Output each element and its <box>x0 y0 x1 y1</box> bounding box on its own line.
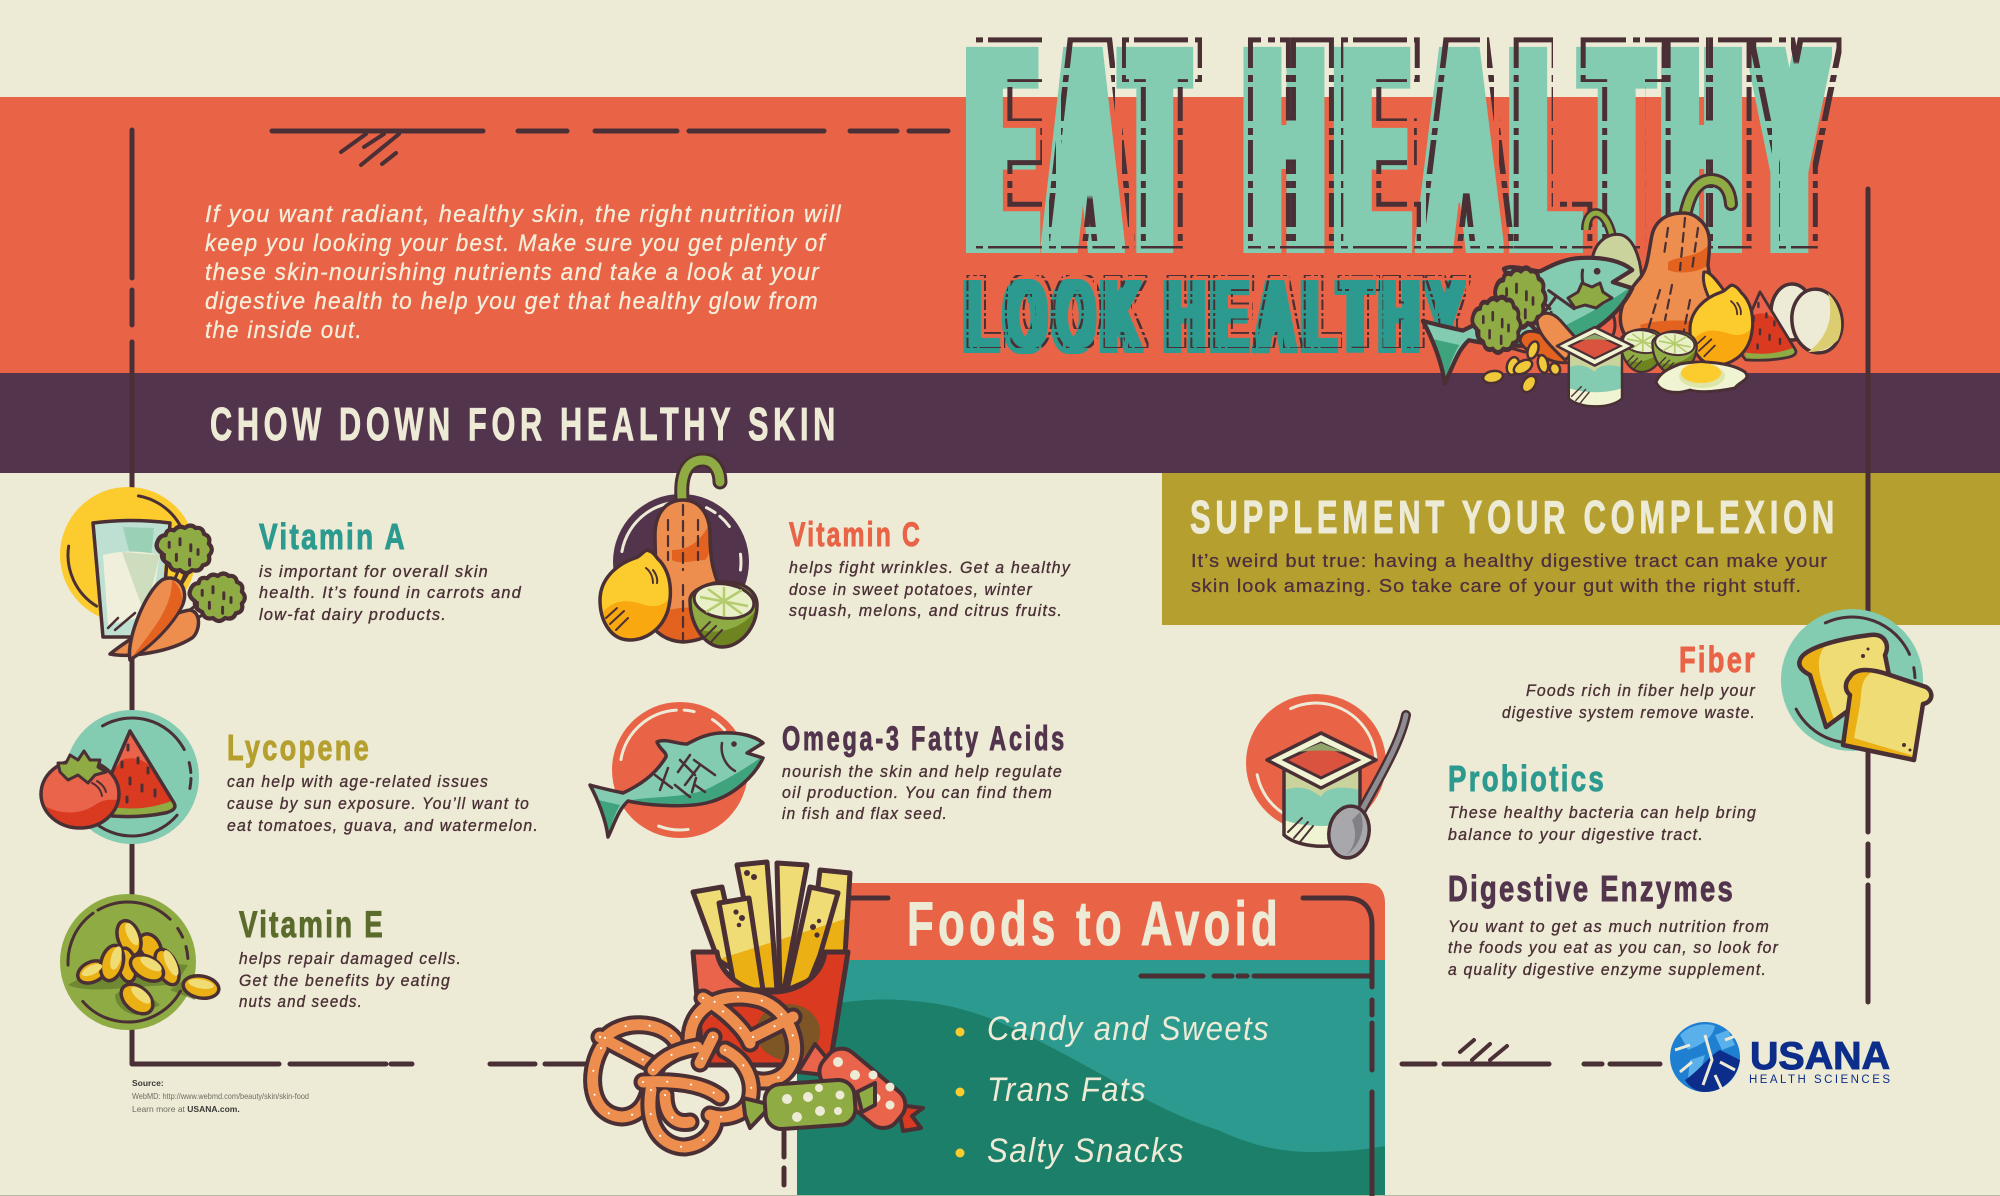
intro paragraph: keep you looking your best. Make sure you get plenty of <box>205 230 827 257</box>
panel: foods to avoid <box>797 883 1385 1196</box>
icon: milk and carrots on yellow circle <box>58 485 245 660</box>
text: fiber: Foods rich in fiber help your <box>1526 681 1756 700</box>
fish <box>1423 258 1632 384</box>
eggs <box>1771 284 1846 356</box>
green candy <box>743 1079 875 1130</box>
text: omega-3 fatty acids: Omega-3 Fatty Acids <box>782 720 1067 758</box>
red candy <box>798 1042 923 1135</box>
text: vitamin E: nuts and seeds. <box>239 992 363 1011</box>
supplement text block: It’s weird but true: having a healthy digestive tract can make your <box>1191 551 1828 571</box>
text: vitamin C: helps fight wrinkles. Get a healthy <box>789 558 1071 577</box>
list: foods to avoid: Candy and Sweets <box>987 1010 1270 1048</box>
supplement text block <box>1190 491 1839 596</box>
text: probiotics <box>1448 758 1757 844</box>
pale gourd <box>1586 213 1642 300</box>
subtitle: LOOK HEALTHY: HEALTHY <box>1169 256 1474 368</box>
capsules <box>1482 340 1562 395</box>
logo: USANA Health Sciences <box>1670 1022 1890 1092</box>
pretzels <box>593 997 795 1147</box>
text: vitamin C: Vitamin C <box>789 516 922 554</box>
text: vitamin A: low-fat dairy products. <box>259 605 447 624</box>
subtitle: LOOK HEALTHY: LOOK <box>965 261 1147 373</box>
text: fiber: digestive system remove waste. <box>1502 703 1756 722</box>
yogurt cup <box>1557 327 1633 406</box>
panel: orange banner <box>0 97 2000 373</box>
text: vitamin C: squash, melons, and citrus fruits. <box>789 601 1063 620</box>
text: vitamin E: Get the benefits by eating <box>239 971 451 990</box>
icon: french fries, pretzels and candy <box>593 862 923 1147</box>
text: digestive enzymes: Digestive Enzymes <box>1448 868 1735 909</box>
logo: USANA Health Sciences: USANA <box>1750 1035 1890 1078</box>
list: foods to avoid <box>956 1010 1270 1170</box>
icon: squash, lemon and lime on purple circle <box>600 460 757 647</box>
icon: tomato and watermelon on teal circle <box>41 696 213 858</box>
decorative frame lines <box>132 130 1868 1196</box>
subtitle: LOOK HEALTHY: LOOK <box>969 256 1151 368</box>
lime slices <box>1620 328 1665 372</box>
text: probiotics: Probiotics <box>1448 758 1606 799</box>
parsley <box>1568 283 1612 308</box>
text: lycopene: can help with age-related issues <box>227 772 489 791</box>
source note: WebMD: http://www.webmd.com/beauty/skin/skin-food <box>132 1091 309 1101</box>
subtitle: LOOK HEALTHY <box>964 275 1471 354</box>
icon: bread on teal circle <box>1768 596 1936 764</box>
text: omega-3 fatty acids: in fish and flax seed. <box>782 804 948 823</box>
watermelon slice <box>1736 292 1797 361</box>
icon: vitamin E capsules on green circle <box>46 880 221 1044</box>
heading: chow down for healthy skin: CHOW DOWN FOR HEALTHY SKIN <box>210 398 840 450</box>
supplement text block: skin look amazing. So take care of your gut with the right stuff. <box>1191 576 1802 596</box>
text: vitamin E: Vitamin E <box>239 904 385 945</box>
title: EAT HEALTHY <box>966 37 1842 253</box>
title: EAT HEALTHY: EAT <box>972 0 1201 309</box>
heading: foods to avoid: Foods to Avoid <box>907 890 1282 959</box>
panel: purple heading band <box>0 373 2000 473</box>
source note <box>132 1078 309 1114</box>
fried egg <box>1656 362 1747 392</box>
fry box <box>693 952 848 1065</box>
list: foods to avoid: Salty Snacks <box>987 1132 1185 1170</box>
intro paragraph: If you want radiant, healthy skin, the right nutrition will <box>205 201 842 228</box>
squash <box>1620 180 1731 356</box>
subtitle: LOOK HEALTHY: HEALTHY <box>1165 261 1470 373</box>
text: digestive enzymes: You want to get as much nutrition from <box>1448 917 1770 936</box>
text: vitamin C <box>789 516 1071 620</box>
text: probiotics: These healthy bacteria can help bring <box>1448 803 1757 822</box>
text: lycopene <box>227 727 539 835</box>
source note: Learn more at USANA.com. <box>132 1104 240 1114</box>
text: lycopene: cause by sun exposure. You’ll want to <box>227 794 530 813</box>
list: foods to avoid: Trans Fats <box>987 1071 1147 1109</box>
intro paragraph <box>205 201 842 344</box>
text: omega-3 fatty acids: oil production. You can find them <box>782 783 1053 802</box>
source note: Source: <box>132 1078 164 1088</box>
fries <box>693 862 850 990</box>
lemon <box>1690 285 1753 365</box>
tomato <box>1555 298 1615 352</box>
text: omega-3 fatty acids: nourish the skin and help regulate <box>782 762 1063 781</box>
text: digestive enzymes <box>1448 868 1779 979</box>
text: digestive enzymes: a quality digestive enzyme supplement. <box>1448 960 1767 979</box>
icon: yogurt and spoon on orange circle <box>1236 683 1406 861</box>
text: vitamin C: dose in sweet potatoes, winter <box>789 580 1033 599</box>
text: probiotics: balance to your digestive tract. <box>1448 825 1704 844</box>
text: vitamin A: is important for overall skin <box>259 562 489 581</box>
text: lycopene: eat tomatoes, guava, and watermelon. <box>227 816 539 835</box>
text: lycopene: Lycopene <box>227 727 371 768</box>
logo globe <box>1670 1022 1740 1092</box>
text: vitamin E <box>239 904 462 1011</box>
text: omega-3 fatty acids <box>782 720 1067 823</box>
text: vitamin E: helps repair damaged cells. <box>239 949 462 968</box>
carrots <box>1520 313 1582 363</box>
intro paragraph: these skin-nourishing nutrients and take a look at your <box>205 259 820 286</box>
intro paragraph: the inside out. <box>205 317 363 344</box>
logo: USANA Health Sciences: HEALTH SCIENCES <box>1749 1074 1890 1086</box>
text: fiber: Fiber <box>1679 639 1757 680</box>
text: vitamin A: health. It’s found in carrots and <box>259 583 522 602</box>
intro paragraph: digestive health to help you get that healthy glow from <box>205 288 819 315</box>
text: fiber <box>1502 639 1757 722</box>
text: vitamin A <box>259 516 522 624</box>
text: digestive enzymes: the foods you eat as you can, so look for <box>1448 938 1779 957</box>
text: vitamin A: Vitamin A <box>259 516 407 557</box>
illustration: pile of healthy foods <box>1423 180 1846 406</box>
icon: fish on orange circle <box>590 700 763 840</box>
panel: supplement your complexion <box>1162 473 2000 625</box>
broccoli <box>1472 268 1546 352</box>
yellow gourd tip <box>1703 272 1725 300</box>
